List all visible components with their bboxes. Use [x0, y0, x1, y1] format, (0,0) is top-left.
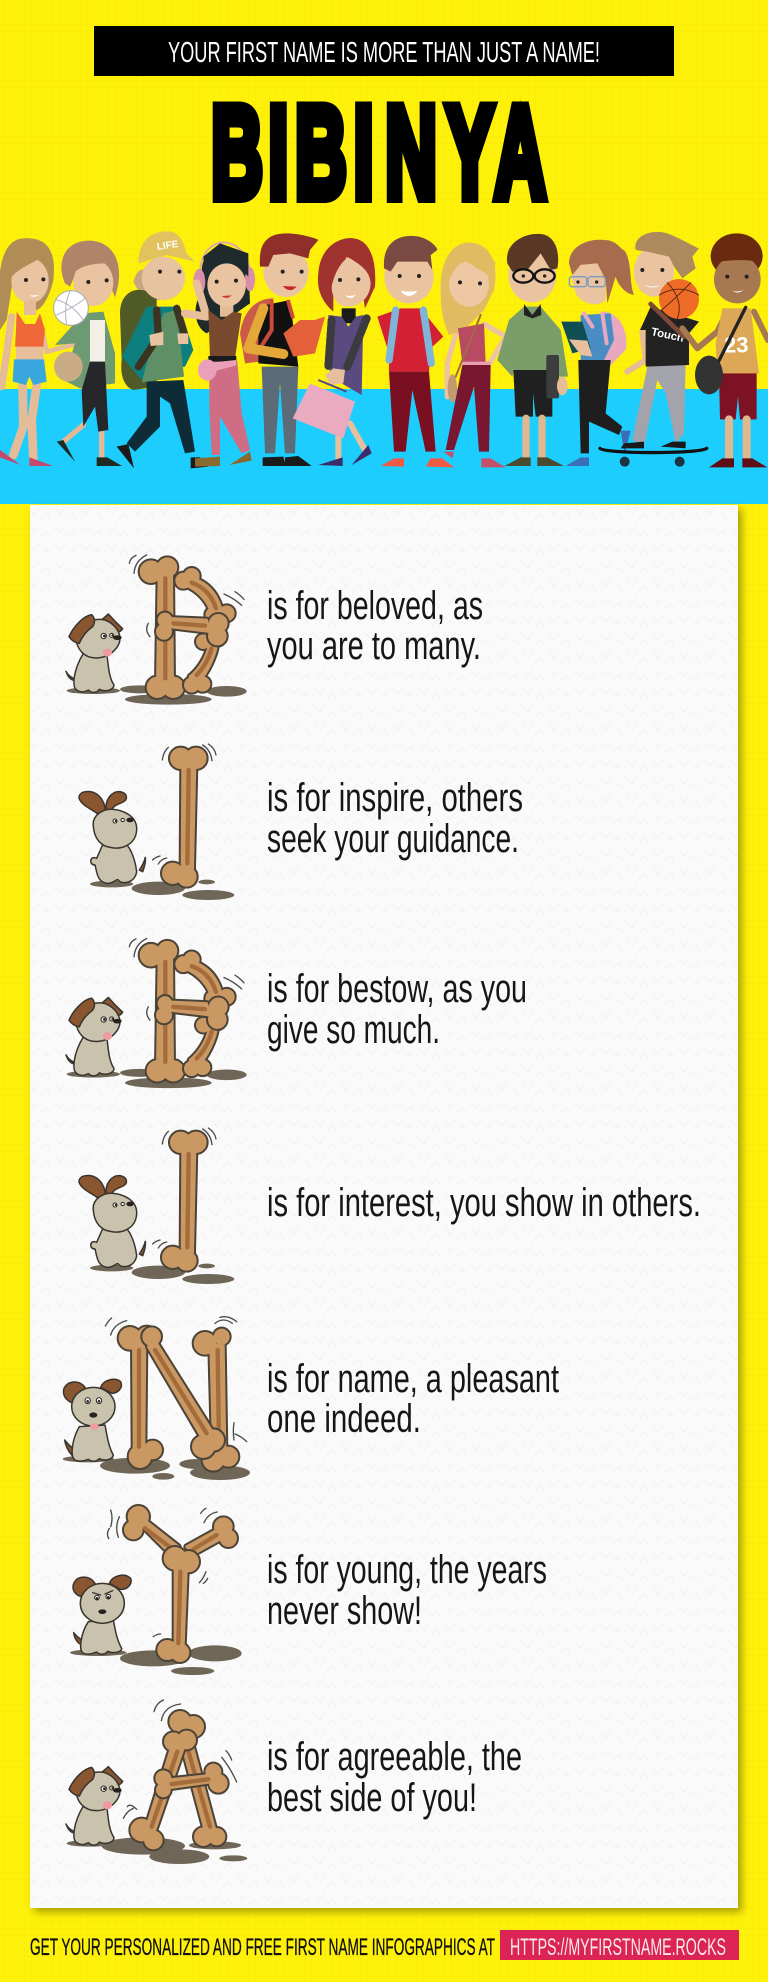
row: Y is for young [70, 1507, 547, 1675]
person: skater with basketball [600, 232, 707, 467]
illustration: dog and bone letter B [66, 938, 247, 1088]
person: skater with basketball: Touch [650, 326, 685, 345]
text: Y line: is for young, the years [267, 1548, 547, 1592]
text: B line [267, 584, 483, 668]
text: B line [267, 967, 527, 1052]
person: hiker with backpack and cap: LIFE [156, 239, 180, 253]
title: BIBINYA [211, 81, 546, 226]
illustration: dog and bone letter I [79, 1128, 234, 1284]
text: B line: is for beloved, as [267, 584, 483, 628]
text: N line [267, 1357, 559, 1441]
panel: white letters panel [30, 505, 738, 1908]
text: I line: seek your guidance. [267, 817, 519, 861]
text: N line: is for name, a pleasant [267, 1357, 559, 1401]
person: blonde girl [441, 243, 506, 467]
person: curly-haired boy in yellow tank [659, 233, 768, 467]
people right half [377, 232, 768, 467]
person: girl in orange top [0, 238, 78, 466]
person: boy with glasses and green sweater [497, 234, 568, 466]
text: B line: is for bestow, as you [267, 967, 527, 1011]
text: B line: give so much. [267, 1008, 440, 1052]
people left half [0, 231, 375, 468]
illustration: dog and bone letter I [79, 744, 234, 900]
text: I line: is for inspire, others [267, 776, 523, 820]
illustration: dog and bone letter B [66, 555, 247, 705]
row: I is for interest [79, 1128, 701, 1284]
row: B is for beloved [66, 555, 483, 705]
person: boy with book [240, 233, 325, 466]
text: A line [267, 1735, 522, 1820]
text: B line: you are to many. [267, 624, 481, 668]
text: A line: best side of you! [267, 1776, 477, 1820]
person: girl with ponytail and tablet [561, 240, 634, 466]
person: girl with pink bag [293, 238, 375, 466]
person: girl with headphones [185, 242, 255, 467]
person: girl in green jacket with volleyball [54, 241, 122, 466]
person: hiker with backpack and cap [117, 231, 208, 468]
person: curly-haired boy in yellow tank: 23 [724, 333, 748, 358]
header banner [94, 26, 674, 76]
illustration: group of young people [0, 231, 768, 504]
row: N is for name [63, 1317, 559, 1480]
text: A line: is for agreeable, the [267, 1735, 522, 1779]
row: B is for bestow [66, 938, 527, 1088]
person: boy in red shirt [377, 236, 454, 467]
text: Y line [267, 1548, 547, 1633]
text: N line: one indeed. [267, 1397, 421, 1441]
illustration: dog and bone letter N [63, 1317, 250, 1480]
text: I line [267, 776, 523, 861]
panel shadow [34, 509, 742, 1912]
text: Y line: never show! [267, 1589, 422, 1633]
illustration: dog and bone letter A [66, 1700, 247, 1864]
icon: basketball [659, 279, 699, 319]
footer [30, 1930, 739, 1961]
illustration: dog and bone letter Y [70, 1507, 242, 1675]
row: A is for agreeable [66, 1700, 522, 1864]
row: I is for inspire [79, 744, 523, 900]
